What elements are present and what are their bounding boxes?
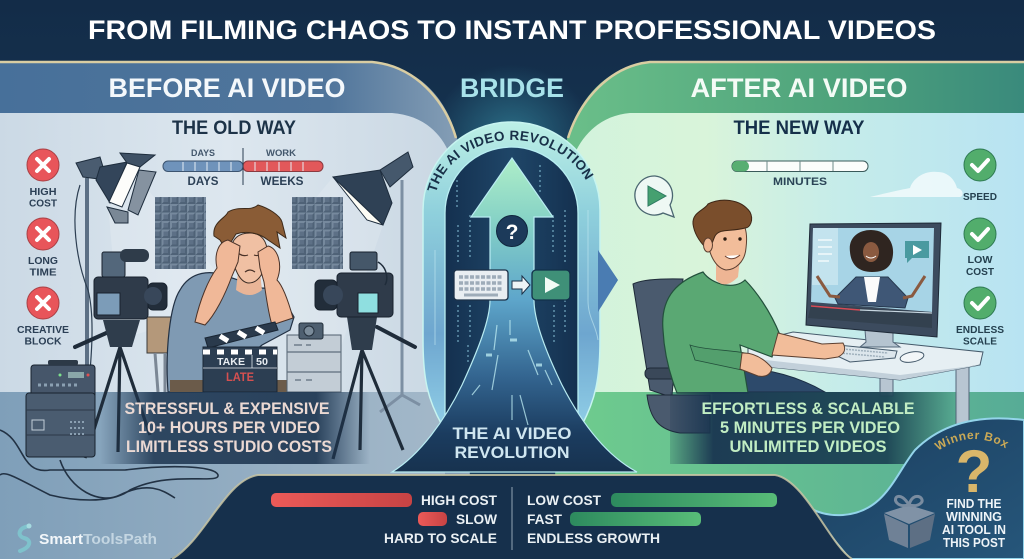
label: high cost: HIGH [30, 186, 56, 198]
panel: bridge [390, 73, 638, 473]
icon: speed check [964, 149, 996, 181]
logo: SmartToolsPath: SmartToolsPath [39, 531, 157, 548]
icon: play button [532, 270, 570, 300]
illustration: equipment case and small camera [287, 323, 341, 392]
icon: low cost check [964, 218, 996, 250]
bar: fast: FAST [527, 511, 562, 527]
subheading: the new way: THE NEW WAY [734, 118, 865, 139]
timeline bar: days versus weeks [163, 148, 323, 188]
illustration: right softbox light [333, 152, 420, 412]
text block: stressful and expensive [100, 392, 370, 464]
text: find the winning AI tool: WINNING [946, 510, 1002, 524]
icon: gold question mark: ? [956, 438, 992, 505]
label: hard to scale: HARD TO SCALE [384, 530, 497, 546]
label: long time: LONG [28, 255, 58, 267]
bar: high cost [271, 492, 497, 508]
bar: low cost: LOW COST [527, 492, 601, 508]
label: endless growth: ENDLESS GROWTH [527, 530, 660, 546]
timeline bar: days versus weeks: WEEKS [260, 176, 304, 188]
timeline bar: days versus weeks: DAYS [188, 176, 219, 188]
label: speed: SPEED [963, 191, 997, 203]
text block: effortless and scalable: 5 MINUTES PER VIDEO [720, 418, 900, 437]
panel: comparison bars [172, 475, 852, 559]
arrow and road [392, 158, 637, 472]
illustration: desk [748, 332, 983, 424]
heading: before AI video: BEFORE AI VIDEO [108, 73, 346, 103]
bar: fast [527, 511, 701, 527]
text: the AI video revolution: THE AI VIDEO [452, 424, 572, 443]
label: long time: TIME [30, 266, 56, 278]
text block: effortless and scalable: UNLIMITED VIDEOS [730, 437, 886, 456]
bar: slow [418, 511, 498, 527]
road light streaks [472, 320, 552, 425]
bar: slow: SLOW [456, 511, 498, 527]
label: low cost: COST [966, 266, 995, 278]
panel: before AI video [0, 62, 470, 559]
illustration: computer monitor with AI presenter [806, 223, 941, 347]
icon: endless scale check [964, 287, 996, 319]
text block: stressful and expensive: STRESSFUL & EXPENSIVE [124, 399, 330, 418]
arrow: keyboard to video [512, 276, 530, 294]
illustration: left camera on tripod [75, 249, 167, 458]
data streams [457, 165, 565, 365]
logo: SmartToolsPath [20, 524, 157, 551]
illustration: clapperboard: 50 [256, 356, 268, 368]
illustration: clapperboard: TAKE [217, 356, 245, 368]
timeline bar: minutes: MINUTES [773, 176, 827, 188]
label: high cost: COST [29, 198, 58, 210]
icon: gift box [884, 496, 935, 548]
icon: creative block cross [27, 287, 59, 319]
label: low cost: LOW [968, 254, 993, 266]
subheading: the old way: THE OLD WAY [172, 118, 296, 139]
text block: stressful and expensive: 10+ HOURS PER VIDEO [138, 418, 320, 437]
icon: question badge [496, 216, 528, 246]
curved label: winner box: Winner Box [934, 432, 1008, 450]
icon: high cost cross [27, 149, 59, 181]
text: the AI video revolution: REVOLUTION [454, 443, 570, 462]
label: endless scale: SCALE [963, 336, 997, 348]
label: creative block: BLOCK [24, 336, 62, 348]
heading: after AI video: AFTER AI VIDEO [690, 73, 908, 103]
title: FROM FILMING CHAOS TO INSTANT PROFESSIONAL VIDEOS [88, 15, 936, 45]
illustration: gear stack and cables [0, 360, 218, 500]
illustration: right camera on tripod [315, 252, 415, 459]
illustration: clapperboard [203, 322, 278, 392]
icon: acoustic panels [155, 197, 343, 269]
illustration: stressed filmmaker [147, 205, 294, 392]
icon: keyboard [454, 270, 508, 300]
label: endless scale: ENDLESS [956, 324, 1004, 336]
arch frame [423, 122, 617, 440]
curved label: the AI video revolution: THE AI VIDEO REVOLUTION [427, 130, 594, 190]
text: find the winning AI tool: FIND THE [946, 497, 1002, 511]
bar: low cost [527, 492, 777, 508]
panel: winner box [814, 417, 1024, 559]
text: find the winning AI tool: AI TOOL IN [942, 523, 1006, 537]
icon: long time cross [27, 218, 59, 250]
icon: question badge: ? [506, 221, 518, 244]
timeline bar: days versus weeks: DAYS [191, 148, 215, 158]
timeline bar: minutes [732, 161, 868, 188]
illustration: clapperboard: LATE [226, 372, 254, 384]
icon: play speech bubble [635, 176, 674, 217]
text: find the winning AI tool: THIS POST [943, 536, 1005, 550]
arrow: chevron to after panel [578, 205, 618, 360]
timeline bar: days versus weeks: WORK [266, 148, 297, 158]
illustration: keyboard and mouse [833, 345, 925, 364]
heading: bridge: BRIDGE [460, 73, 564, 103]
panel: after AI video [555, 62, 1024, 559]
illustration: left studio light [75, 153, 156, 395]
label: creative block: CREATIVE [17, 324, 69, 336]
text block: effortless and scalable: EFFORTLESS & SCALABLE [702, 399, 914, 418]
bar: high cost: HIGH COST [421, 492, 497, 508]
illustration: relaxed creator [663, 200, 845, 393]
illustration: office chair [633, 279, 710, 433]
icon: cloud [870, 172, 963, 197]
text block: stressful and expensive: LIMITLESS STUDIO COSTS [126, 437, 332, 456]
text block: effortless and scalable [670, 392, 960, 464]
